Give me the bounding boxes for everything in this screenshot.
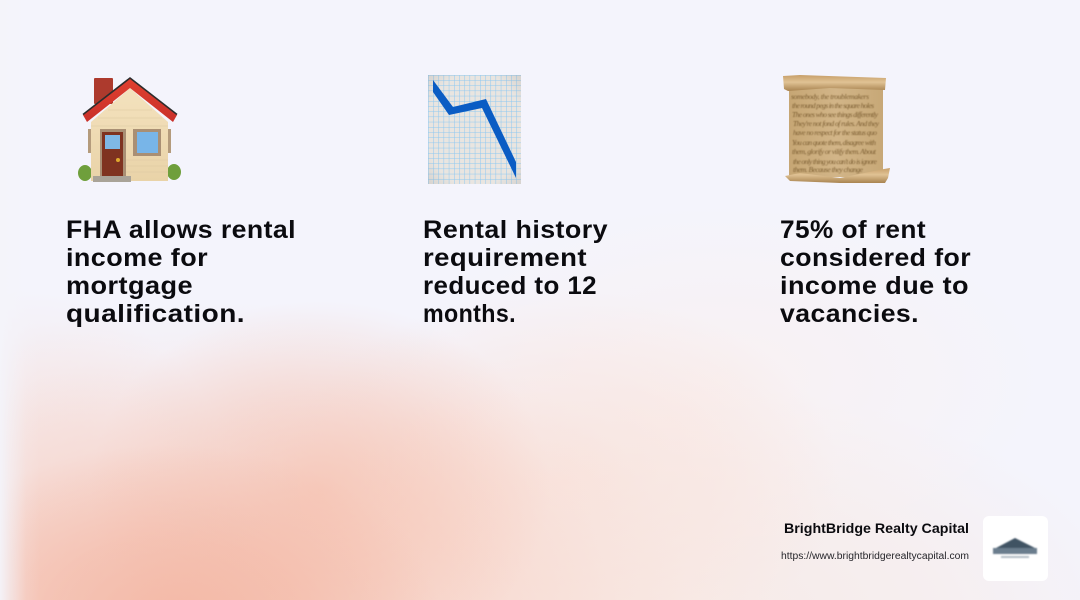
column 2 text [423,216,608,328]
column 2 text: requirement [423,244,587,272]
brand name: BrightBridge Realty Capital [784,521,969,536]
column 3 text [780,216,971,328]
column 1 text [66,216,296,328]
roof [83,78,177,122]
scroll writing: You can quote them, disagree with [792,138,876,147]
step [93,176,131,182]
column 1 text: mortgage [66,272,193,300]
column 1 text: income for [66,244,208,272]
scroll writing: them, glorify or vilify them. About [792,147,877,156]
scroll writing [791,92,880,174]
icon: falling chart [428,75,521,184]
scroll writing: have no respect for the status quo [793,128,877,137]
bushes [78,164,181,181]
chimney [94,78,113,104]
scroll top roll [783,75,886,91]
website url: https://www.brightbridgerealtycapital.com [781,551,969,562]
door [100,129,126,176]
column 2 text: Rental history [423,216,608,244]
column 3 text: vacancies. [780,300,919,328]
scroll writing: somebody, the troublemakers [791,92,869,101]
icon: scroll [783,75,890,183]
scroll writing: them. Because they change [793,165,864,174]
column 1 text: qualification. [66,300,245,328]
window [133,129,161,156]
scroll writing: the only thing you can't do is ignore [793,157,878,166]
scroll bottom roll [785,168,890,183]
column 2 text: reduced to 12 [423,272,597,300]
wall [91,88,168,181]
column 2 text: months. [423,300,516,328]
scroll writing: the round pegs in the square holes [792,101,874,110]
scroll writing: They're not fond of rules. And they [793,119,880,128]
icon: house [78,78,181,182]
logo card [983,516,1048,581]
column 3 text: income due to [780,272,969,300]
column 3 text: considered for [780,244,971,272]
scroll writing: The ones who see things differently [792,110,879,119]
column 1 text: FHA allows rental [66,216,296,244]
column 3 text: 75% of rent [780,216,926,244]
